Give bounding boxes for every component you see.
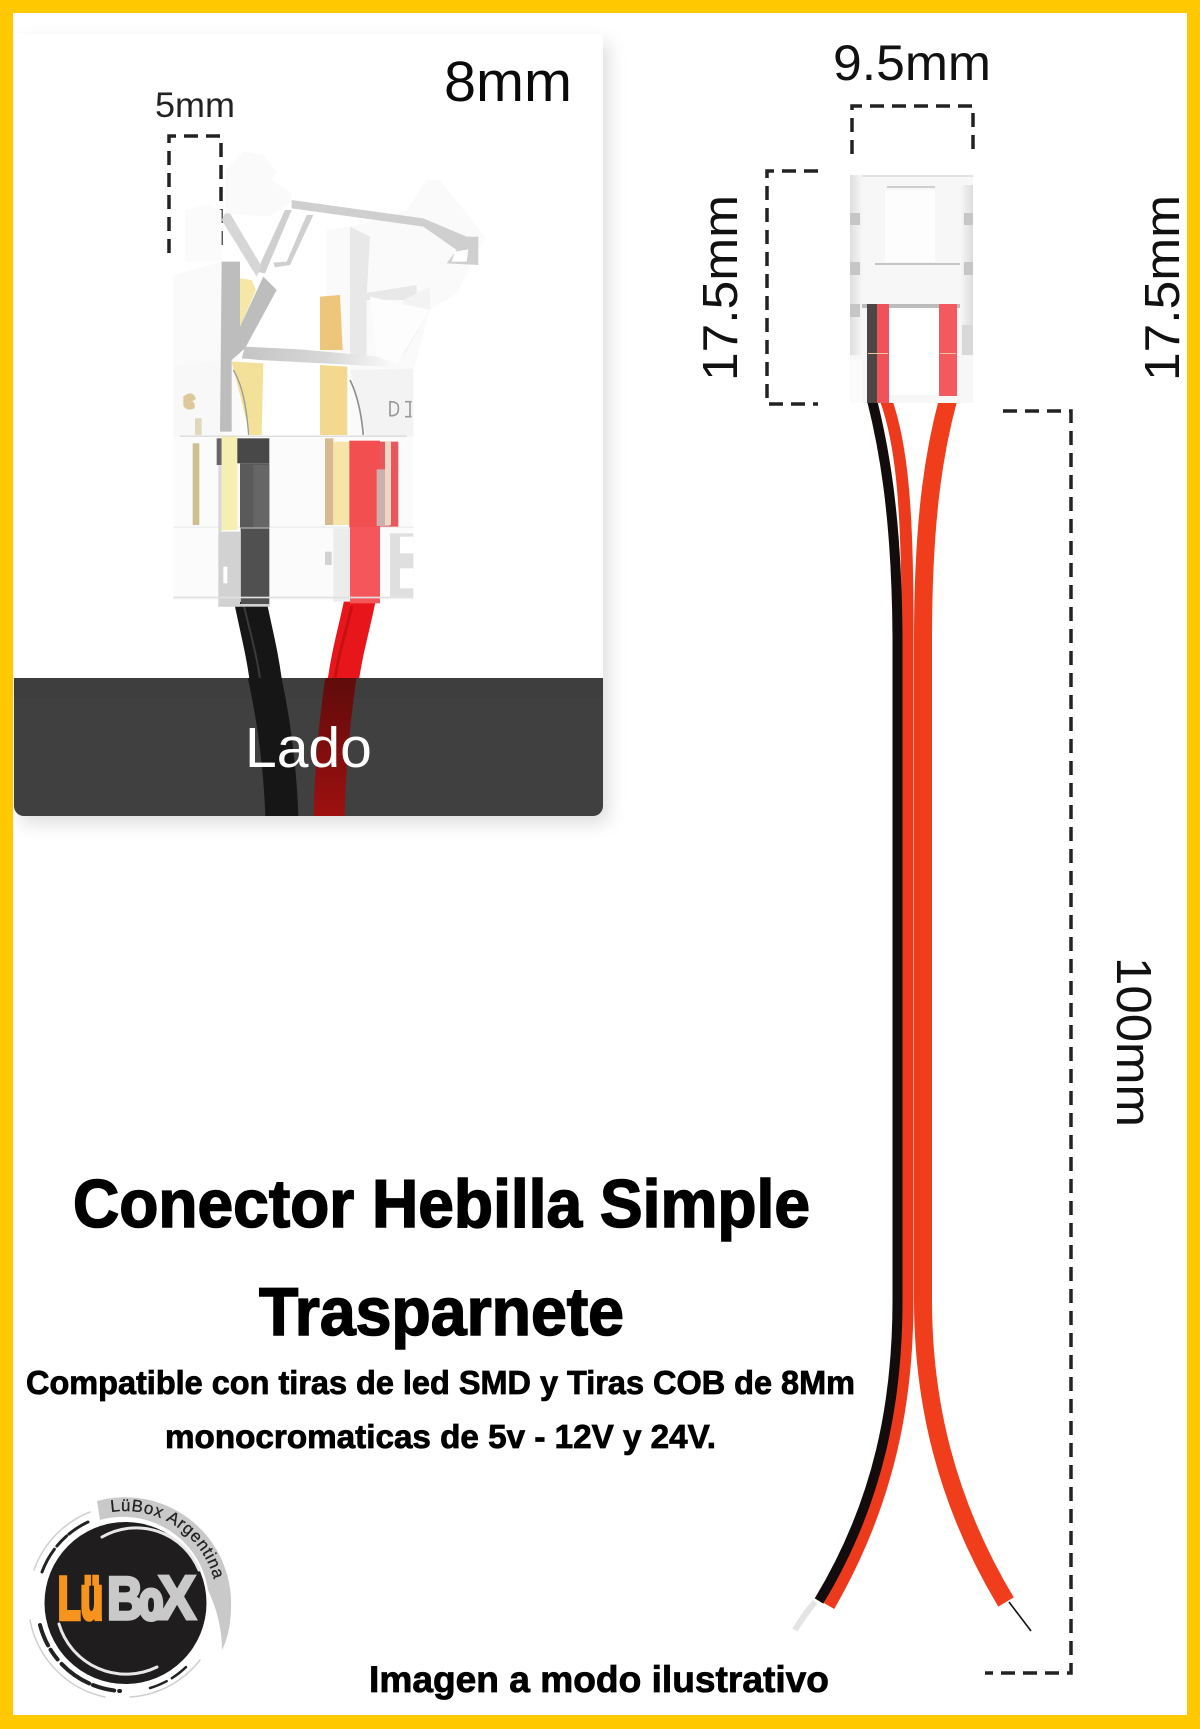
title: Conector Hebilla Simple (73, 1166, 810, 1242)
cables above label bar (244, 600, 360, 690)
bracket: 5mm (169, 136, 221, 253)
label bar: Lado (14, 670, 603, 820)
subtitle: monocromaticas de 5v - 12V y 24V. (165, 1418, 716, 1455)
logo wordmark Box: B (107, 1565, 143, 1632)
logo brush strokes (30, 1512, 200, 1697)
logo disc (44, 1522, 206, 1684)
subtitle (26, 1364, 855, 1455)
right wire (923, 400, 1006, 1602)
dimension: 17.5mm left: 17.5mm (694, 195, 748, 381)
bracket: 100mm (985, 411, 1071, 1673)
dimension: 9.5mm: 9.5mm (833, 35, 991, 91)
twin wire black side (819, 400, 898, 1601)
black terminal (867, 304, 878, 403)
logo arc text: LüBox Argentina (111, 1499, 222, 1580)
footnote: Imagen a modo ilustrativo (369, 1659, 829, 1700)
logo grey swoosh (97, 1497, 231, 1650)
red terminal right (939, 304, 957, 396)
title: Trasparnete (259, 1274, 624, 1350)
logo wordmark Box: o (139, 1571, 163, 1631)
connector: front view (850, 175, 973, 403)
panel: side view card background (14, 34, 603, 816)
dimension: 5mm: 5mm (155, 86, 235, 125)
logo wordmark Box: X (158, 1564, 196, 1633)
logo wordmark Lü: Lü (58, 1565, 103, 1632)
logo wordmark Box (107, 1564, 196, 1633)
wire assembly: front view (795, 400, 1031, 1631)
bracket: 9.5mm (852, 106, 973, 154)
red terminal left (877, 304, 889, 403)
logo: LüBox Argentina (29, 1497, 232, 1698)
bracket: 17.5mm (767, 171, 818, 404)
logo inner arcs (102, 1528, 199, 1570)
connector: exploded side view (173, 152, 485, 607)
dimension: 17.5mm right: 17.5mm (1136, 195, 1190, 381)
label: Lado: Lado (245, 716, 372, 780)
twin wire red side (829, 400, 908, 1606)
subtitle: Compatible con tiras de led SMD y Tiras COB de 8Mm (26, 1364, 855, 1401)
dimension: 100mm: 100mm (1106, 957, 1160, 1127)
title (73, 1166, 810, 1350)
wire tips (795, 1602, 815, 1630)
dimension: 8mm: 8mm (444, 50, 572, 114)
